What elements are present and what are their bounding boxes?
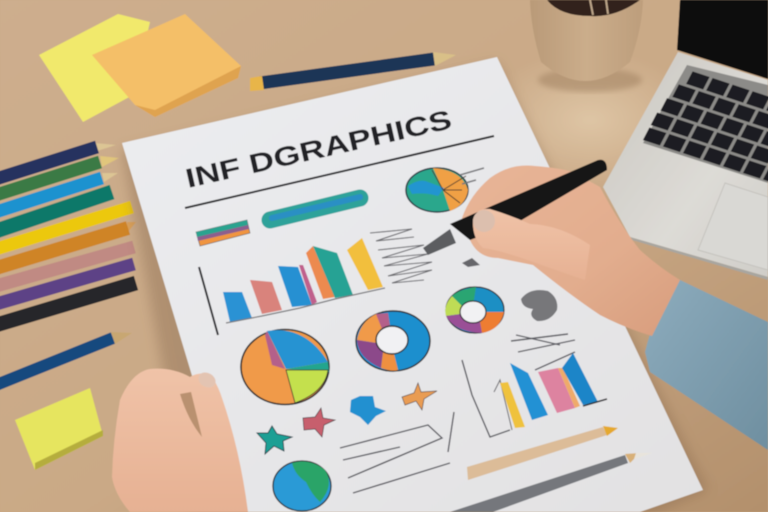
bottom pie chart bbox=[273, 461, 331, 511]
thumb bbox=[473, 209, 590, 280]
blue pencil lower left bbox=[0, 332, 132, 385]
pencil bottom right long bbox=[467, 426, 618, 480]
sticky notes top left bbox=[39, 14, 241, 122]
grey pencil bottom right bbox=[450, 453, 652, 512]
grey blob sketch bbox=[521, 290, 557, 321]
sticky note bottom left bbox=[15, 388, 103, 470]
title: INF DGRAPHICS bbox=[183, 104, 455, 194]
sleeve bbox=[645, 279, 768, 450]
laptop bbox=[603, 0, 768, 280]
bar chart bbox=[199, 238, 385, 335]
pencil top bbox=[250, 52, 456, 91]
paper shadow bbox=[122, 62, 708, 512]
sketch lines and box bbox=[340, 334, 575, 493]
scribble lines right of pie bbox=[460, 168, 484, 184]
paper sheet bbox=[122, 57, 703, 512]
thumb nail bbox=[473, 210, 495, 232]
title underline bbox=[185, 136, 494, 208]
gap between fingers bbox=[180, 392, 202, 437]
small sketch under fingers bbox=[462, 258, 480, 267]
sketch lines beside bar chart bbox=[370, 229, 432, 283]
stars bbox=[257, 383, 437, 454]
large pie chart bbox=[241, 330, 329, 404]
coloured pencils left bbox=[0, 143, 136, 325]
left hand bbox=[112, 369, 248, 512]
lower right bar chart bbox=[494, 353, 607, 430]
small stacked bar bbox=[196, 220, 250, 246]
donut chart bbox=[356, 311, 430, 371]
keyboard bbox=[643, 65, 768, 183]
trackpad bbox=[698, 183, 768, 270]
cup bbox=[530, 0, 643, 92]
top right pie chart bbox=[406, 168, 468, 212]
left thumb nail bbox=[196, 369, 218, 391]
pen bbox=[423, 160, 607, 255]
teal bar bbox=[270, 197, 360, 220]
small donut chart bbox=[445, 287, 504, 333]
right hand bbox=[423, 160, 680, 336]
